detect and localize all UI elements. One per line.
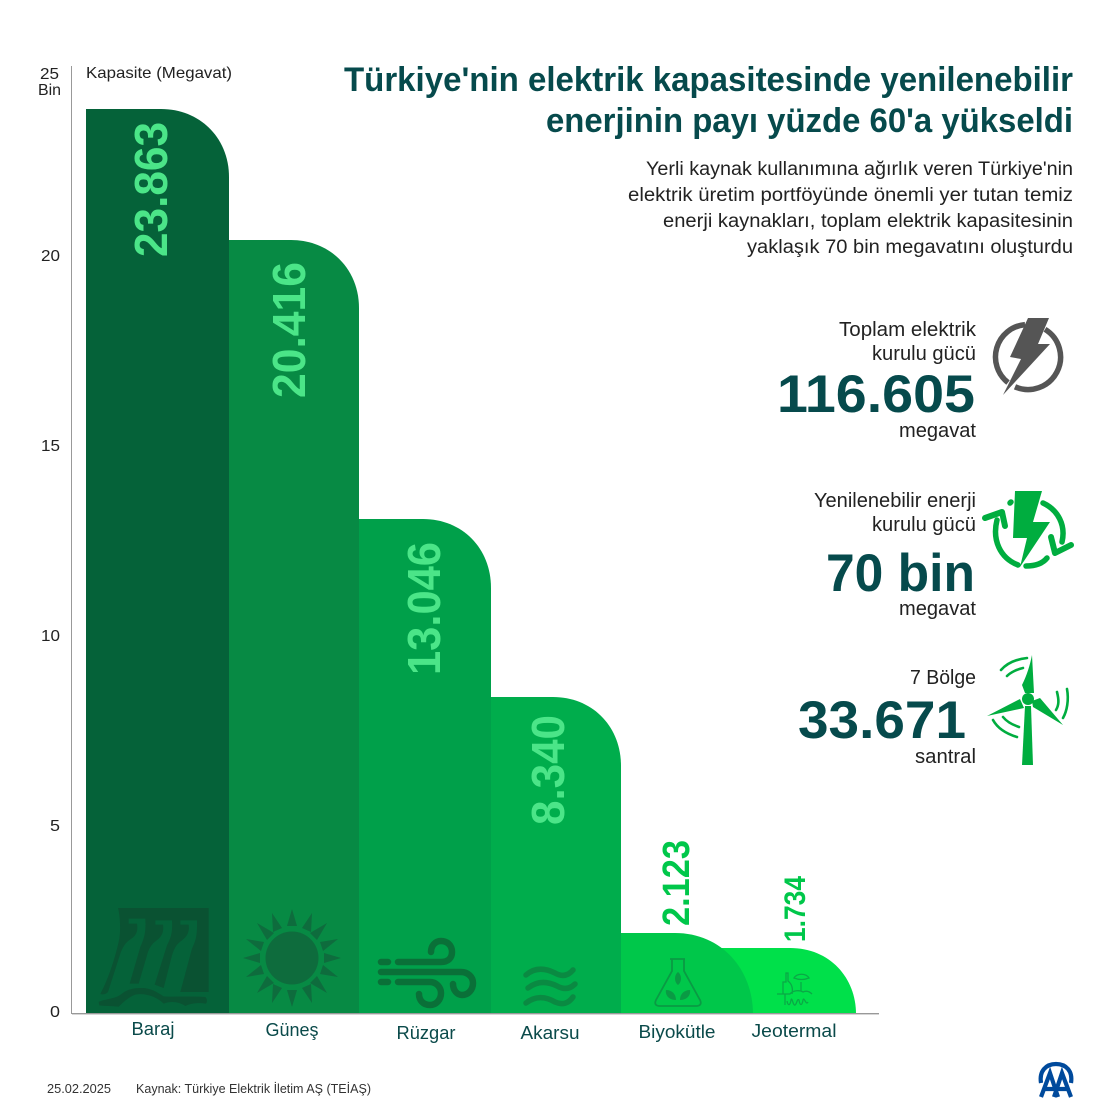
description: enerji kaynakları, toplam elektrik kapasitesinin xyxy=(663,211,1073,232)
stat: plants: 7 Bölge xyxy=(910,667,976,689)
bar: Baraj xyxy=(86,109,229,1014)
y axis: 0 xyxy=(50,1004,60,1021)
footer source: Kaynak: Türkiye Elektrik İletim AŞ (TEİAŞ) xyxy=(136,1081,371,1096)
bar: Rüzgar xyxy=(359,519,491,1014)
x axis baseline xyxy=(72,1013,879,1014)
stat: total capacity: kurulu gücü xyxy=(872,343,976,365)
icon: sun xyxy=(243,909,341,1007)
icon: wind turbine xyxy=(987,655,1068,765)
y axis: 5 xyxy=(50,818,60,835)
title: enerjinin payı yüzde 60'a yükseldi xyxy=(546,102,1073,140)
bar: Güneş xyxy=(229,240,359,1014)
y axis: 25 xyxy=(40,66,59,83)
description xyxy=(628,159,1073,258)
category label: Baraj: Baraj xyxy=(132,1019,174,1039)
y axis: 20 xyxy=(41,248,60,265)
stat: renewable capacity xyxy=(814,490,976,620)
icon: flask xyxy=(655,959,701,1006)
y axis xyxy=(38,66,72,1021)
bar: Jeotermal xyxy=(700,948,856,1014)
stat: total capacity xyxy=(777,319,977,442)
category label: Biyokütle: Biyokütle xyxy=(638,1022,716,1042)
category label: Akarsu: Akarsu xyxy=(520,1023,580,1043)
stat: total capacity: 116.605 xyxy=(777,365,975,424)
description: Yerli kaynak kullanımına ağırlık veren Türkiye'nin xyxy=(646,159,1073,180)
description: yaklaşık 70 bin megavatını oluşturdu xyxy=(747,237,1073,258)
stat: renewable capacity: 70 bin xyxy=(826,544,975,603)
icon: wind xyxy=(381,941,473,1005)
description: elektrik üretim portföyünde önemli yer tutan temiz xyxy=(628,185,1073,206)
icon: lightning in ring xyxy=(995,318,1061,395)
axis title: Kapasite (Megavat) xyxy=(86,65,232,82)
stat: plants: santral xyxy=(915,746,976,768)
icon: dam xyxy=(99,908,209,1007)
value: 13.046: 13.046 xyxy=(398,542,450,675)
stat: plants xyxy=(798,667,976,768)
stat: renewable capacity: megavat xyxy=(899,598,976,620)
stat: renewable capacity: kurulu gücü xyxy=(872,514,976,536)
title: Türkiye'nin elektrik kapasitesinde yenilenebilir xyxy=(344,61,1073,99)
y axis: Bin xyxy=(38,82,61,99)
title xyxy=(344,61,1073,140)
footer date: 25.02.2025 xyxy=(47,1081,111,1096)
bar: Akarsu xyxy=(491,697,621,1014)
category label: Güneş: Güneş xyxy=(266,1020,318,1040)
value: 20.416: 20.416 xyxy=(263,262,315,398)
value: 1.734: 1.734 xyxy=(779,876,812,942)
y axis: 15 xyxy=(41,438,60,455)
bar: Biyokütle xyxy=(621,933,753,1014)
logo: AA xyxy=(1041,1064,1071,1097)
stat: plants: 33.671 xyxy=(798,691,966,750)
stat: total capacity: megavat xyxy=(899,420,976,442)
value: 2.123: 2.123 xyxy=(656,840,698,926)
category label: Rüzgar: Rüzgar xyxy=(396,1023,456,1043)
stat: renewable capacity: Yenilenebilir enerji xyxy=(814,490,976,512)
icon: geothermal xyxy=(777,973,812,1005)
value: 8.340: 8.340 xyxy=(522,715,574,825)
icon: renewable lightning xyxy=(985,491,1071,567)
value: 23.863: 23.863 xyxy=(125,122,177,257)
category label: Jeotermal: Jeotermal xyxy=(752,1021,836,1041)
stat: total capacity: Toplam elektrik xyxy=(839,319,977,341)
y axis: 10 xyxy=(41,628,60,645)
icon: water waves xyxy=(526,969,575,1004)
